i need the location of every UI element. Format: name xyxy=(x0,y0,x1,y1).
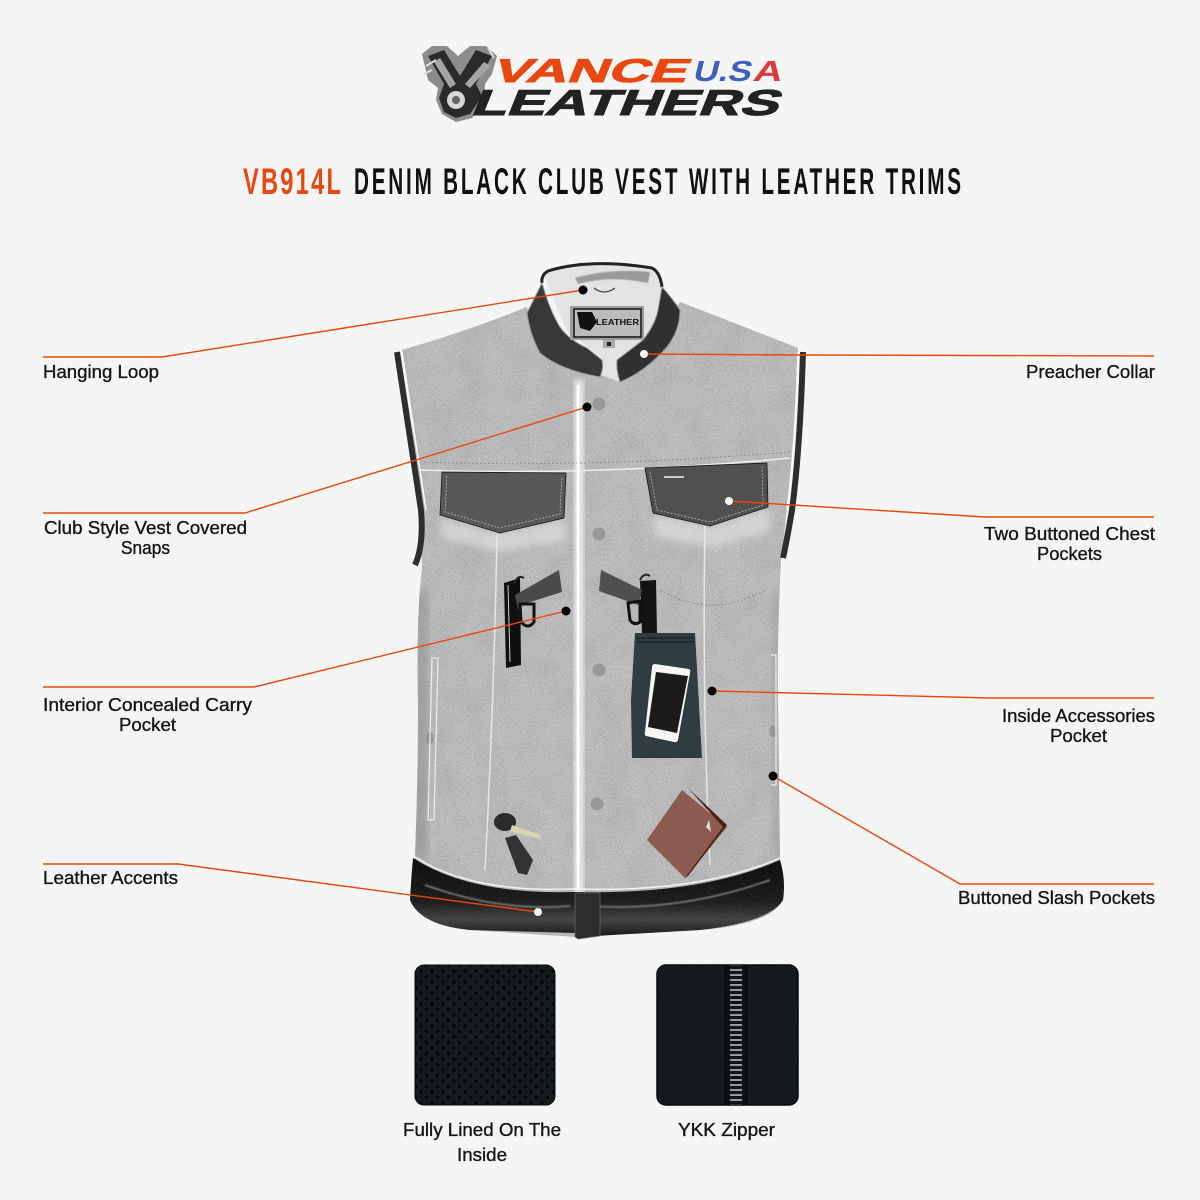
hem highlight xyxy=(415,857,780,889)
callout: Club Style Vest Covered Snaps: Club Style Vest Covered xyxy=(44,518,247,538)
callout: Inside Accessories Pocket: Inside Accessories xyxy=(1002,706,1155,726)
armhole highlight left xyxy=(402,352,426,510)
callout: Inside Accessories Pocket xyxy=(708,686,1155,746)
snap buttons xyxy=(426,398,777,810)
vest illustration xyxy=(390,264,810,950)
armhole binding right xyxy=(783,352,803,558)
callout: Two Buttoned Chest Pockets xyxy=(725,497,1155,564)
callout: Inside Accessories Pocket: Pocket xyxy=(1050,726,1107,746)
title xyxy=(243,161,961,203)
collar top rim xyxy=(542,264,662,287)
vest body xyxy=(390,290,810,950)
product name: DENIM BLACK CLUB VEST WITH LEATHER TRIMS xyxy=(354,162,961,203)
hem placket xyxy=(575,893,600,939)
collar mottling xyxy=(575,271,650,284)
callout: Interior Concealed Carry Pocket: Interior Concealed Carry xyxy=(43,695,252,715)
hanger loop stitch xyxy=(594,288,615,292)
callout: Preacher Collar: Preacher Collar xyxy=(1026,362,1155,382)
wordmark: VANCE: VANCE xyxy=(488,52,697,89)
callout: Club Style Vest Covered Snaps xyxy=(43,402,592,558)
caption: Fully Lined On The Inside xyxy=(403,1120,561,1165)
caption: Fully Lined On The Inside: Inside xyxy=(457,1145,507,1165)
left pistol xyxy=(504,570,562,668)
wallet xyxy=(647,788,727,878)
callout: Leather Accents xyxy=(43,864,542,916)
buttonhole xyxy=(664,476,684,478)
caption: Fully Lined On The Inside: Fully Lined On The xyxy=(403,1120,561,1140)
collar right xyxy=(617,287,680,382)
callout: Two Buttoned Chest Pockets: Pockets xyxy=(1037,544,1102,564)
armhole binding left xyxy=(397,352,422,565)
detail panel: mesh lining xyxy=(415,965,555,1105)
detail panel: YKK zipper xyxy=(657,965,798,1105)
letter A: A xyxy=(750,55,787,88)
flap stitching xyxy=(445,466,763,528)
callout: Two Buttoned Chest Pockets: Two Buttoned Chest xyxy=(984,524,1155,544)
left chest pocket flap xyxy=(440,472,566,533)
neck tag xyxy=(570,306,644,348)
pouch gathers xyxy=(636,638,695,642)
left slash pocket xyxy=(428,658,438,820)
car key xyxy=(494,813,541,875)
collar left xyxy=(527,283,603,377)
callout: Leather Accents: Leather Accents xyxy=(43,868,178,888)
callout: Buttoned Slash Pockets xyxy=(768,772,1155,908)
callout: Interior Concealed Carry Pocket xyxy=(43,606,570,735)
icon: engine emblem xyxy=(422,46,497,122)
callout: Buttoned Slash Pockets: Buttoned Slash Pockets xyxy=(958,888,1155,908)
callout: Hanging Loop xyxy=(43,286,588,382)
logo: Vance Leathers USA xyxy=(422,46,790,123)
callout: Interior Concealed Carry Pocket: Pocket xyxy=(119,715,176,735)
neck tag: LEATHER xyxy=(596,318,639,327)
right pistol xyxy=(599,570,657,634)
wordmark: LEATHERS: LEATHERS xyxy=(467,83,790,123)
right chest pocket flap xyxy=(645,463,768,526)
callout: Club Style Vest Covered Snaps: Snaps xyxy=(121,538,170,558)
caption: YKK Zipper: YKK Zipper xyxy=(678,1120,775,1140)
armhole highlight right xyxy=(787,352,798,510)
callout: Preacher Collar xyxy=(640,350,1155,382)
accessories pouch xyxy=(631,633,702,758)
letters U.S: U.S xyxy=(690,55,756,88)
right slash pocket xyxy=(771,655,776,785)
collar interior xyxy=(543,265,664,382)
product code: VB914L xyxy=(243,161,341,202)
callout: Hanging Loop: Hanging Loop xyxy=(43,362,159,382)
wordmark: USA xyxy=(690,55,787,88)
leather hem xyxy=(410,858,784,936)
phone xyxy=(645,664,690,742)
